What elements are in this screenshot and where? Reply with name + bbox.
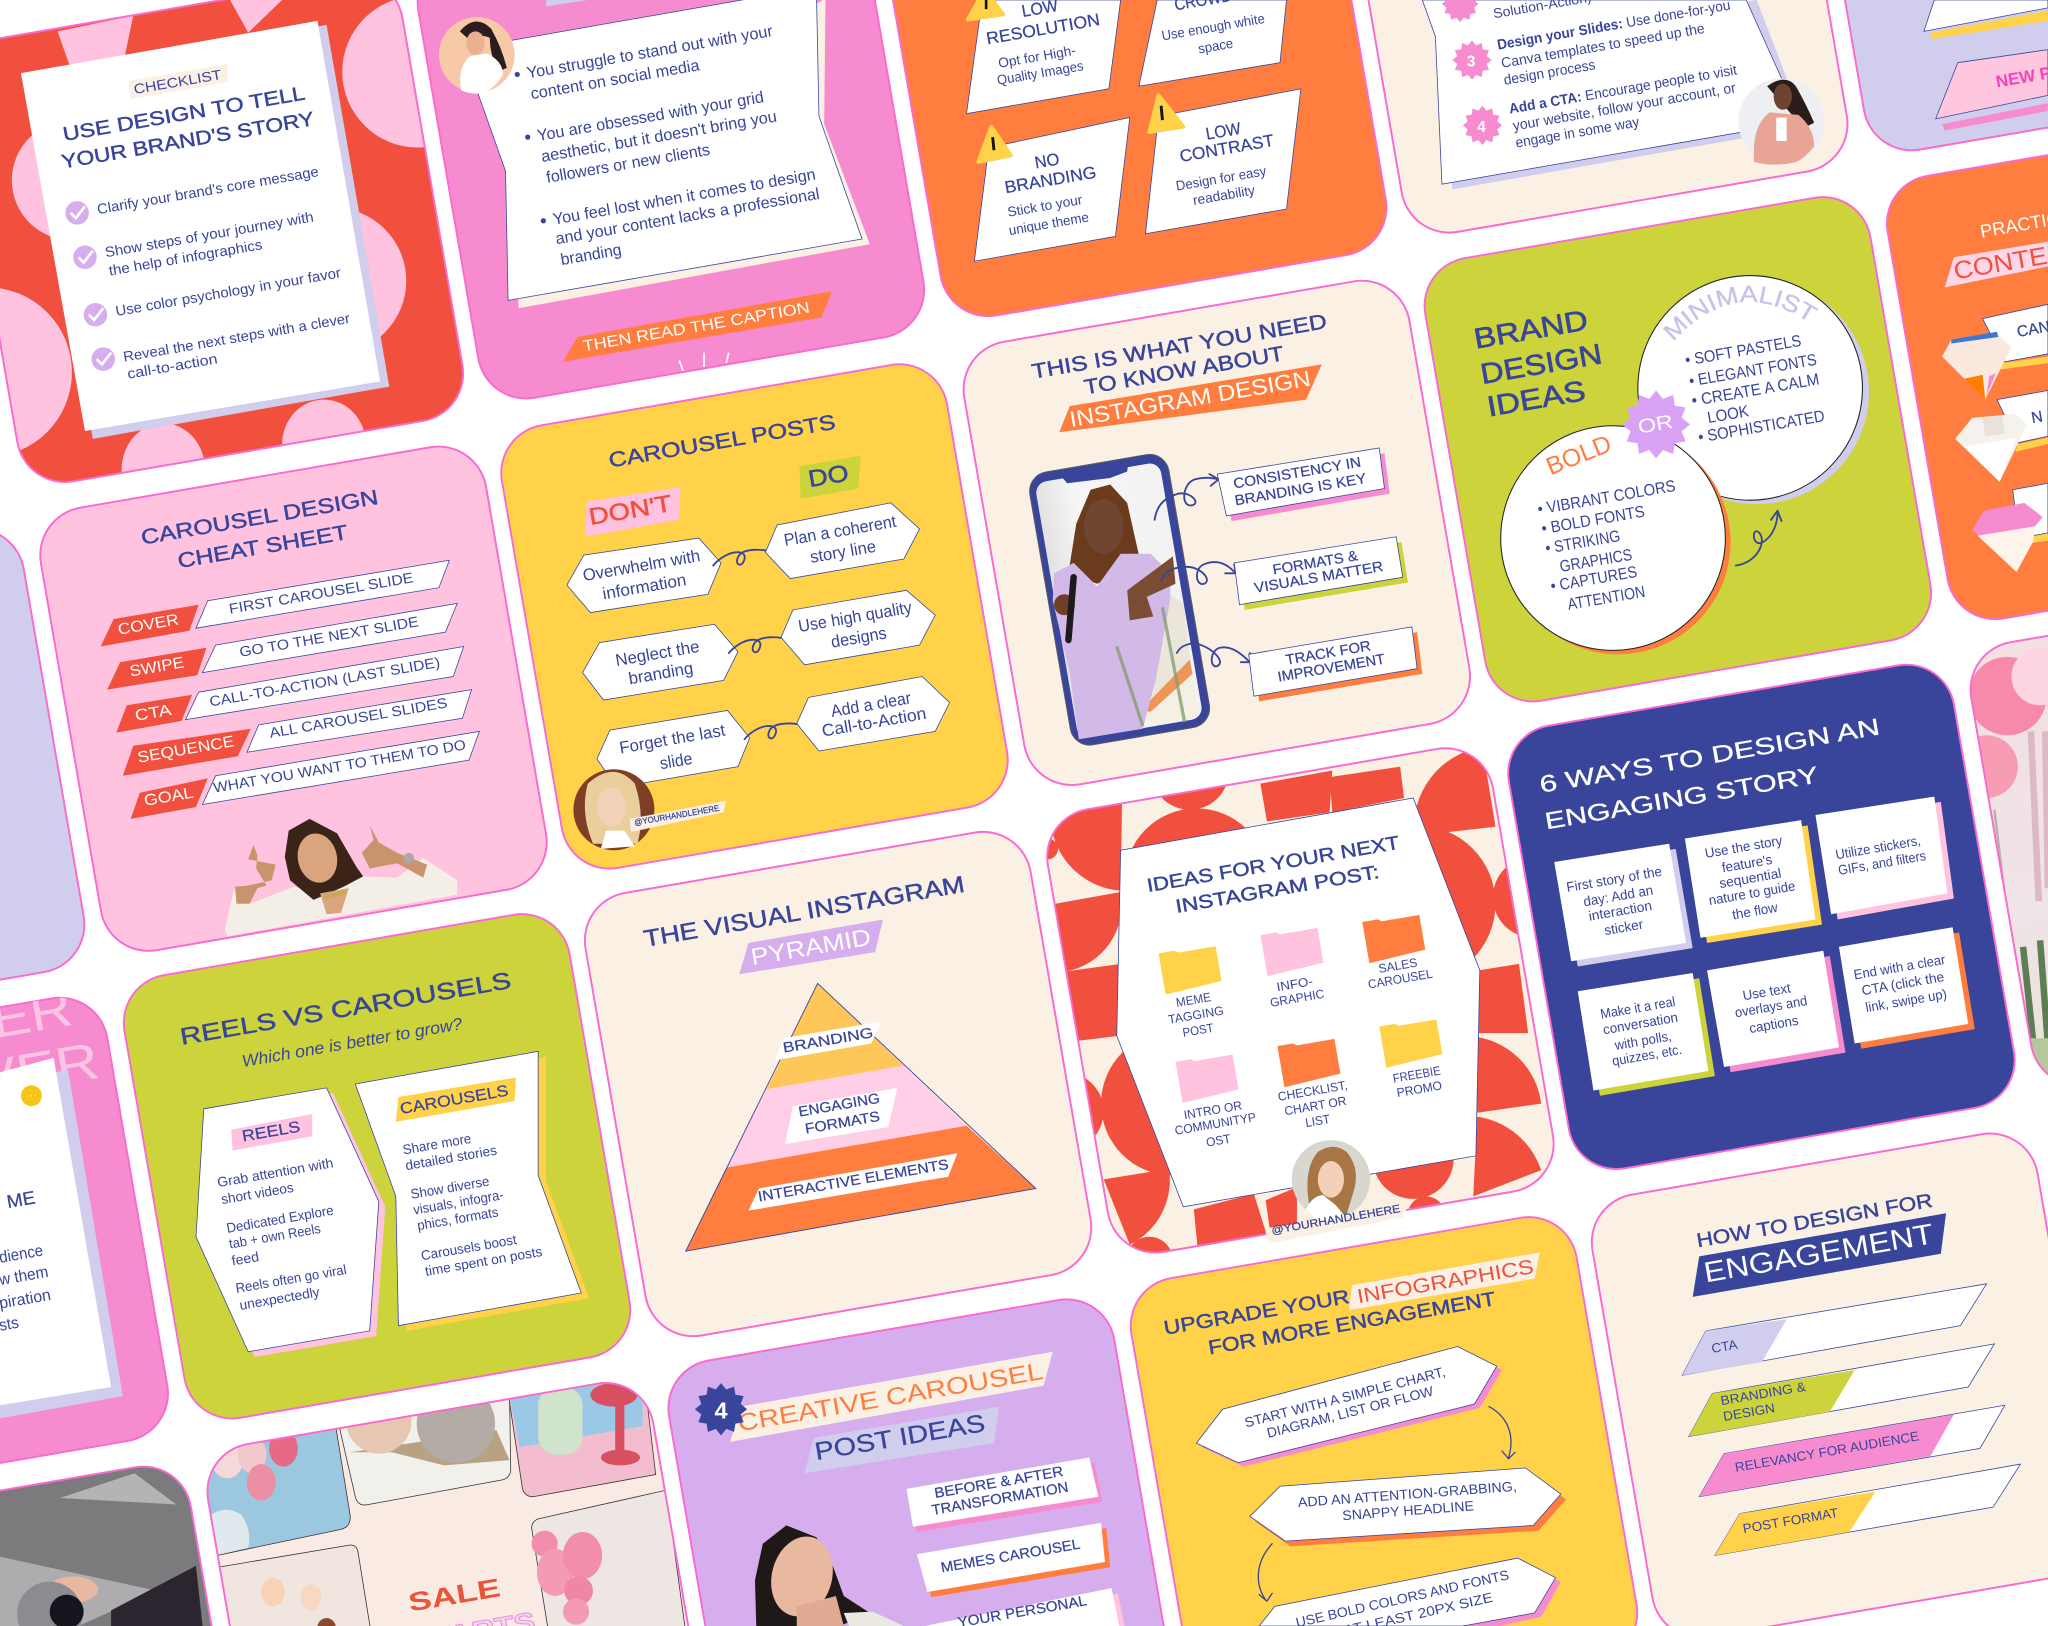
- panel: lavender left edge card: [0, 521, 92, 1041]
- paper sheet: [1117, 798, 1480, 1207]
- bar: branding and design: BRANDING &: [1719, 1379, 1807, 1408]
- heading: HOW TO DESIGN FOR: [1695, 1190, 1934, 1252]
- row: cta: CALL-TO-ACTION (LAST SLIDE): [208, 655, 441, 711]
- heading: [1162, 1252, 1540, 1359]
- panel: balloons photo: [1970, 634, 2048, 1076]
- heading: CAROUSEL DESIGN: [139, 486, 380, 550]
- pair: call to action: Add a clear: [829, 688, 913, 721]
- column: reels: Reels often go viral: [234, 1262, 348, 1296]
- circle: bold: • BOLD FONTS: [1540, 503, 1646, 538]
- card: crowded: [1139, 0, 1287, 86]
- paper sheet: [477, 0, 862, 300]
- text: [0, 1186, 52, 1335]
- card: no branding: unique theme: [1008, 209, 1090, 238]
- tip box 4: with polls,: [1613, 1028, 1673, 1053]
- folder: freebie promo: FREEBIE: [1392, 1064, 1442, 1086]
- heading: YOUR BRAND'S STORY: [60, 108, 316, 173]
- folder: infographic: GRAPHIC: [1269, 987, 1325, 1010]
- card: low resolution: Quality Images: [996, 58, 1085, 88]
- panel: how to design for engagement: [1584, 1126, 2048, 1626]
- heading: CAROUSEL POSTS: [607, 411, 837, 472]
- heading: THIS IS WHAT YOU NEED: [1030, 310, 1329, 384]
- tip box 6: [1839, 927, 1975, 1049]
- step text: design process: [1503, 57, 1597, 89]
- box: track: IMPROVEMENT: [1277, 651, 1386, 686]
- panel: the visual instagram pyramid: [577, 824, 1099, 1344]
- card: crowded: Use enough white: [1160, 11, 1266, 43]
- pair: information: Overwhelm with: [581, 546, 702, 585]
- row: swipe: SWIPE: [128, 654, 185, 680]
- heading: INSTAGRAM DESIGN: [1068, 366, 1312, 432]
- column: carousels: detailed stories: [404, 1143, 498, 1173]
- panel: sale photo grid: [206, 1382, 690, 1626]
- panel: practical content: [1879, 107, 2048, 627]
- pyramid chart: [686, 983, 1036, 1251]
- pair: call to action: Call-to-Action: [820, 704, 928, 741]
- column: carousels: phics, formats: [416, 1204, 500, 1233]
- pair: branding: branding: [627, 658, 695, 688]
- circle: minimalist: • SOPHISTICATED: [1697, 407, 1826, 447]
- heading: PYRAMID: [749, 924, 873, 970]
- pyramid chart: ENGAGING: [797, 1091, 881, 1121]
- arrow: [1258, 1544, 1272, 1601]
- circle: minimalist: • CREATE A CALM: [1690, 370, 1821, 410]
- tip box 4: [1578, 973, 1715, 1096]
- column: reels: Dedicated Explore: [225, 1203, 335, 1236]
- card: low contrast: CONTRAST: [1178, 131, 1275, 166]
- tip box 3: Utilize stickers,: [1834, 833, 1922, 862]
- box: track: TRACK FOR: [1284, 638, 1372, 669]
- folder: meme tagging post: TAGGING: [1167, 1004, 1225, 1027]
- folder: intro or community post: INTRO OR: [1183, 1098, 1243, 1122]
- bar: relevancy for audience: RELEVANCY FOR AUDIENCE: [1734, 1428, 1921, 1475]
- bullet list: followers or new clients: [545, 141, 711, 187]
- row: goal: [131, 731, 479, 819]
- tip box 5: overlays and: [1734, 993, 1808, 1020]
- photo: vase and lamp: [508, 1384, 656, 1498]
- photo: smiling woman: [755, 1525, 904, 1626]
- folder: checklist chart or list: [1277, 1036, 1349, 1130]
- bullet list: [515, 22, 821, 269]
- panel: left pink card: [0, 996, 169, 1464]
- bar: post format: POST FORMAT: [1742, 1505, 1839, 1536]
- step: start with a simple chart: [1196, 1347, 1502, 1467]
- pair: information: Plan a coherent: [782, 512, 898, 550]
- row: goal: WHAT YOU WANT TO THEM TO DO: [212, 737, 467, 797]
- folder: infographic: INFO-: [1275, 974, 1314, 994]
- tip box 2: nature to guide: [1708, 878, 1796, 908]
- box: consistency: BRANDING IS KEY: [1234, 471, 1368, 509]
- column: carousels: CAROUSELS: [399, 1083, 510, 1118]
- heading: [730, 1352, 1053, 1473]
- box: memes carousel: [917, 1523, 1110, 1597]
- step text: Add a CTA: Encourage people to visit: [1508, 62, 1738, 118]
- heading: [139, 486, 380, 573]
- circle: bold: ATTENTION: [1566, 583, 1646, 614]
- folder: infographic: [1260, 925, 1325, 1010]
- circle: bold: GRAPHICS: [1558, 546, 1634, 576]
- pair: information: [567, 503, 920, 613]
- banner: then read the caption: [563, 291, 832, 362]
- card: low contrast: [1145, 89, 1301, 234]
- checklist items: Use color psychology in your favor: [114, 265, 342, 320]
- banner: new post: [1936, 50, 2048, 119]
- bullet list: You feel lost when it comes to design: [551, 166, 817, 229]
- folder: sales carousel: CAROUSEL: [1367, 967, 1434, 992]
- pyramid chart: INTERACTIVE ELEMENTS: [757, 1157, 950, 1205]
- box: formats: [1234, 537, 1408, 610]
- folder: meme tagging post: POST: [1181, 1021, 1215, 1040]
- pair: branding: Use high quality: [797, 598, 914, 636]
- column: carousels: Show diverse: [409, 1174, 490, 1202]
- badge: or: [1622, 391, 1690, 458]
- tip box 5: captions: [1748, 1013, 1800, 1036]
- column: reels: [196, 1088, 385, 1357]
- checklist items: [65, 164, 351, 383]
- folder: intro or community post: OST: [1205, 1132, 1232, 1150]
- panel: upgrade your infographics: [1123, 1210, 1645, 1626]
- tip box 5: [1707, 951, 1845, 1072]
- panel: lavender new post: [1796, 0, 2048, 158]
- folder: sales carousel: SALES: [1377, 955, 1418, 976]
- step: attention-grabbing headline: SNAPPY HEADLINE: [1342, 1498, 1474, 1523]
- photo: woman with thumbs up: [225, 819, 457, 936]
- folder: meme tagging post: MEME: [1175, 990, 1212, 1010]
- list row with thumbnail 1: [1942, 304, 2048, 400]
- tip box 6: link, swipe up): [1864, 986, 1948, 1015]
- heading: CREATIVE CAROUSEL: [736, 1358, 1045, 1437]
- tag: checklist: CHECKLIST: [133, 67, 223, 97]
- text: sale: [406, 1572, 537, 1626]
- icons: numbered badges: [1442, 0, 1502, 145]
- row: cover: [101, 560, 449, 646]
- arrow: curly: [1736, 511, 1781, 566]
- circle: bold: [1501, 426, 1731, 654]
- row: sequence: ALL CAROUSEL SLIDES: [268, 695, 449, 742]
- folder: checklist chart or list: CHECKLIST,: [1277, 1078, 1349, 1104]
- phone with presenter: [1027, 451, 1213, 748]
- step: attention-grabbing headline: ADD AN ATTENTION-GRABBING,: [1297, 1479, 1517, 1510]
- box: consistency: [1217, 448, 1390, 521]
- bullet list: You are obsessed with your grid: [536, 88, 765, 145]
- folder: freebie promo: [1379, 1017, 1443, 1100]
- heading: REELS VS CAROUSELS: [178, 967, 513, 1050]
- heading: [1693, 1190, 1946, 1297]
- heading: THE VISUAL INSTAGRAM: [642, 871, 966, 952]
- checklist items: Show steps of your journey with: [104, 209, 315, 261]
- bullet list: aesthetic, but it doesn't bring you: [540, 108, 778, 166]
- circle: bold: • CAPTURES: [1549, 563, 1639, 596]
- heading: [178, 967, 513, 1071]
- bar: post format: [1715, 1464, 2020, 1555]
- tip box 6: CTA (click the: [1860, 969, 1945, 998]
- pair: branding: Neglect the: [614, 637, 701, 670]
- heading: Which one is better to grow?: [240, 1014, 464, 1071]
- column: reels: REELS: [241, 1119, 302, 1145]
- avatar: woman with phone: [439, 17, 515, 94]
- pair: call to action: Forget the last: [618, 721, 727, 758]
- bar: relevancy for audience: [1699, 1405, 2005, 1497]
- pair: call to action: slide: [658, 749, 694, 773]
- panel: you struggle caption hook: [410, 0, 932, 406]
- box: formats: FORMATS &: [1271, 548, 1359, 579]
- row: sequence: SEQUENCE: [136, 733, 236, 767]
- folder: checklist chart or list: CHART OR: [1283, 1094, 1348, 1118]
- step: attention-grabbing headline: [1250, 1468, 1566, 1546]
- column: reels: tab + own Reels: [228, 1221, 322, 1252]
- tag: do: [799, 456, 861, 499]
- box: formats: VISUALS MATTER: [1253, 559, 1384, 597]
- paper sheet: [0, 1058, 111, 1405]
- column: carousels: [355, 1051, 589, 1331]
- tip box 1: day: Add an: [1582, 883, 1654, 909]
- circle: bold: • VIBRANT COLORS: [1536, 477, 1677, 519]
- folder: freebie promo: PROMO: [1396, 1078, 1443, 1100]
- tip box 4: Make it a real: [1599, 994, 1676, 1022]
- avatar: smiling woman: [1292, 1140, 1370, 1221]
- row: swipe: [107, 603, 457, 690]
- heading: [1030, 310, 1329, 432]
- row: cover: FIRST CAROUSEL SLIDE: [228, 570, 415, 618]
- bar: branding and design: [1689, 1344, 1994, 1437]
- card: low resolution: [967, 0, 1121, 114]
- panel: reels vs carousels: [116, 907, 638, 1426]
- list row with thumbnail 3: [1972, 483, 2048, 572]
- tip box 1: First story of the: [1565, 864, 1663, 895]
- bar: branding and design: DESIGN: [1722, 1400, 1776, 1424]
- checklist items: Reveal the next steps with a clever: [122, 311, 351, 366]
- tip box 1: [1554, 844, 1693, 966]
- tip box 1: interaction: [1587, 898, 1653, 924]
- heading: CHEAT SHEET: [176, 521, 350, 573]
- circle: minimalist: MINIMALIST: [1663, 286, 1818, 340]
- pair: branding: [583, 590, 935, 700]
- text: sale: SALE: [406, 1572, 503, 1618]
- tag: checklist: [128, 64, 227, 99]
- list row with thumbnail 2: N: [2030, 408, 2044, 427]
- folder: intro or community post: COMMUNITYP: [1174, 1110, 1257, 1138]
- bar: cta: [1682, 1284, 1987, 1375]
- card: low resolution: Opt for High-: [997, 43, 1077, 71]
- heading: INFOGRAPHICS: [1355, 1256, 1535, 1308]
- panel: design mistakes warnings: [873, 0, 1394, 324]
- column: carousels: visuals, infogra-: [412, 1187, 505, 1218]
- panel: what you need to know about instagram design: [956, 273, 1478, 793]
- arrow: [1489, 1407, 1515, 1459]
- panel: brand design ideas: [1424, 196, 1932, 702]
- heading: IDEAS: [1485, 375, 1588, 424]
- folder: meme tagging post: [1159, 944, 1225, 1040]
- icons: warning triangles: [968, 0, 1183, 162]
- photo: disco balls: [339, 1402, 512, 1506]
- step text: engage in some way: [1514, 114, 1641, 152]
- checklist items: Clarify your brand's core message: [96, 164, 320, 218]
- column: reels: feed: [231, 1249, 260, 1268]
- pyramid chart: FORMATS: [804, 1109, 881, 1138]
- circle: minimalist: • SOFT PASTELS: [1684, 332, 1803, 370]
- step text: [1492, 0, 1738, 152]
- box: consistency: CONSISTENCY IN: [1232, 455, 1362, 492]
- tag: don't: [585, 487, 681, 537]
- circle: minimalist: [1637, 275, 1869, 504]
- folder: intro or community post: [1174, 1052, 1257, 1150]
- step: bold colors and fonts: [1259, 1558, 1561, 1626]
- tag: don't: DON'T: [587, 490, 674, 530]
- bullet list: and your content lacks a professional: [554, 185, 821, 248]
- panel: carousel posts do and don't: [494, 357, 1015, 876]
- badge: 4: 4: [714, 1397, 728, 1423]
- tag: do: DO: [806, 460, 851, 492]
- step: start with a simple chart: DIAGRAM, LIST OR FLOW: [1265, 1384, 1435, 1441]
- handle tag: @YOURHANDLEHERE: [633, 803, 720, 827]
- card: no branding: NO: [1033, 149, 1061, 172]
- step text: your website, follow your account, or: [1512, 80, 1737, 135]
- heading: UPGRADE YOUR: [1162, 1286, 1351, 1340]
- tip box 5: Use text: [1742, 980, 1792, 1003]
- card: low contrast: readability: [1192, 183, 1256, 208]
- tip box 6: End with a clear: [1853, 952, 1947, 982]
- box: track: [1249, 627, 1422, 701]
- tip box 2: Use the story: [1704, 833, 1784, 861]
- heading: 6 WAYS TO DESIGN AN: [1538, 713, 1882, 798]
- column: carousels: Share more: [402, 1131, 472, 1157]
- column: reels: unexpectedly: [238, 1284, 321, 1313]
- panel: ideas for your next instagram post: [1046, 747, 1555, 1254]
- circle: minimalist: LOOK: [1706, 402, 1750, 427]
- list row with thumbnail 2: [1955, 391, 2048, 482]
- column: reels: short videos: [220, 1180, 295, 1207]
- icons: numbered badges: 3: [1467, 54, 1476, 71]
- heading: [642, 871, 966, 974]
- card: no branding: Stick to your: [1006, 192, 1084, 220]
- panel: brand story checklist: [0, 0, 464, 483]
- step: start with a simple chart: START WITH A SIMPLE CHART,: [1243, 1364, 1447, 1430]
- panel: 6 ways to design an engaging story: [1501, 657, 2022, 1177]
- heading: USE DESIGN TO TELL: [61, 83, 307, 146]
- heading: [1472, 305, 1605, 424]
- heading: POST IDEAS: [813, 1410, 987, 1466]
- paper sheet: [21, 21, 380, 431]
- avatar: woman in pink blazer: [1738, 78, 1825, 165]
- bullet list: You struggle to stand out with your: [525, 22, 775, 82]
- badge: or: OR: [1636, 411, 1675, 439]
- heading: FOR MORE ENGAGEMENT: [1207, 1288, 1497, 1359]
- heading: [60, 83, 316, 173]
- bullet list: content on social media: [529, 56, 702, 103]
- panel: carousel design cheat sheet: [33, 439, 554, 958]
- card: no branding: [974, 118, 1130, 261]
- pair: information: story line: [809, 537, 877, 567]
- banner: then read the caption: THEN READ THE CAPTION: [582, 299, 811, 355]
- icons: numbered badges: 4: [1477, 119, 1486, 136]
- box: memes carousel: MEMES CAROUSEL: [940, 1537, 1081, 1576]
- tip box 2: the flow: [1731, 900, 1779, 922]
- step text: Canva templates to speed up the: [1500, 21, 1706, 72]
- panel: carousel script steps: [1334, 0, 1855, 240]
- heading: BRAND: [1472, 305, 1590, 356]
- handle tag: @YOURHANDLEHERE: [1271, 1203, 1401, 1237]
- card: no branding: BRANDING: [1003, 163, 1098, 197]
- avatar: blonde woman: [573, 769, 654, 850]
- card: low contrast: Design for easy: [1175, 163, 1268, 194]
- tip box 3: GIFs, and filters: [1837, 848, 1927, 878]
- decorative heading letters: [0, 998, 98, 1080]
- column: carousels: time spent on posts: [424, 1244, 544, 1279]
- box: before and after: BEFORE & AFTER: [933, 1464, 1065, 1502]
- photo: pink balloons: [532, 1490, 686, 1626]
- column: reels: Grab attention with: [216, 1155, 334, 1190]
- heading: [1145, 833, 1402, 918]
- tip box 1: sticker: [1603, 917, 1645, 938]
- bullet list: branding: [559, 241, 623, 269]
- card: low contrast: LOW: [1204, 119, 1242, 144]
- heading: [1945, 204, 2048, 287]
- heading: DESIGN: [1478, 338, 1605, 391]
- row: sequence: [123, 690, 472, 776]
- icon: dots: [21, 1085, 42, 1106]
- card: crowded: space: [1197, 36, 1234, 57]
- photo: peach balloons: [218, 1545, 371, 1626]
- circle: bold: • STRIKING: [1544, 527, 1622, 558]
- box: your personal story: [925, 1588, 1125, 1626]
- card: low resolution: RESOLUTION: [985, 10, 1101, 48]
- folder: sales carousel: [1362, 912, 1434, 992]
- heading: ENGAGEMENT: [1701, 1218, 1936, 1289]
- pair: branding: designs: [829, 623, 888, 652]
- folder: checklist chart or list: LIST: [1304, 1112, 1331, 1130]
- heading: ENGAGING STORY: [1543, 761, 1820, 834]
- row: cta: CTA: [134, 702, 173, 725]
- badge: 4: [695, 1383, 747, 1435]
- paper sheet: [1422, 0, 1781, 184]
- circle: bold: BOLD: [1542, 430, 1616, 481]
- bar: cta: CTA: [1710, 1337, 1739, 1356]
- box: before and after: TRANSFORMATION: [931, 1480, 1070, 1519]
- photo: balloons on sky: [196, 1426, 350, 1555]
- box: before and after: [906, 1458, 1102, 1532]
- row: cover: COVER: [117, 611, 180, 639]
- tip box 2: sequential: [1718, 866, 1782, 891]
- panel: 4 creative carousel post ideas: [661, 1292, 1182, 1626]
- pair: information: information: [601, 570, 688, 603]
- tip box 2: [1685, 820, 1822, 943]
- row: goal: GOAL: [143, 785, 195, 810]
- tip box 4: conversation: [1602, 1010, 1679, 1037]
- pair: call to action: [597, 677, 950, 788]
- text: ME: [5, 1186, 37, 1212]
- row: swipe: GO TO THE NEXT SLIDE: [238, 614, 420, 661]
- heading: TO KNOW ABOUT: [1082, 342, 1286, 399]
- circle: minimalist: • ELEGANT FONTS: [1688, 351, 1818, 391]
- checklist items: call-to-action: [126, 351, 219, 383]
- heading: [1538, 713, 1882, 834]
- tip box 3: [1815, 797, 1954, 919]
- column: carousels: Carousels boost: [420, 1232, 518, 1263]
- pyramid chart: BRANDING: [782, 1025, 874, 1057]
- heading: IDEAS FOR YOUR NEXT: [1145, 833, 1402, 897]
- tip box 2: feature's: [1721, 852, 1774, 875]
- checklist items: the help of infographics: [108, 237, 264, 280]
- tip box 4: quizzes, etc.: [1611, 1042, 1683, 1069]
- panel: grey photo: [0, 1466, 212, 1626]
- handle tag: [1266, 1203, 1409, 1243]
- heading: INSTAGRAM POST:: [1174, 862, 1381, 918]
- row: cta: [116, 646, 464, 733]
- arrows: [1155, 474, 1250, 666]
